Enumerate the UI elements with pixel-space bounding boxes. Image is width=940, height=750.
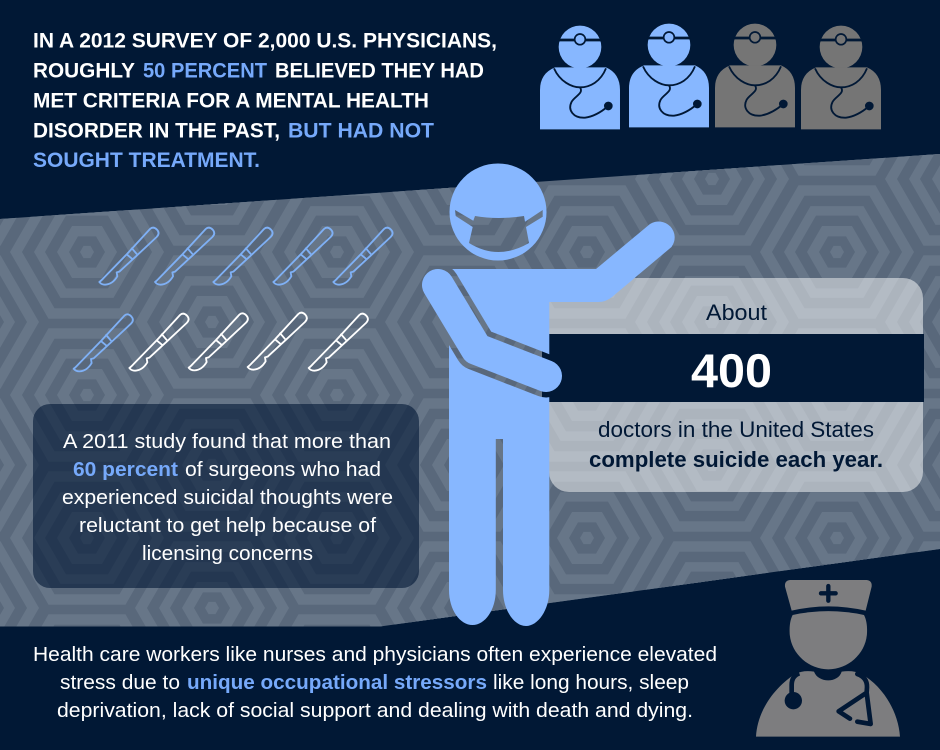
text: occupational stressors paragraph: unique occupational stressors	[187, 672, 487, 694]
lowered arm	[438, 285, 546, 376]
icon: doctor 4 grey	[801, 26, 881, 129]
panel text: licensing concerns	[142, 543, 313, 565]
panel: 400 doctors callout	[542, 278, 924, 492]
figure: masked surgeon pointing	[438, 163, 675, 626]
heading: 2012 survey statement: SOUGHT TREATMENT.	[33, 149, 260, 172]
heading: 2012 survey statement: MET CRITERIA FOR A MENTAL HEALTH	[33, 90, 429, 112]
heading: 2012 survey statement: IN A 2012 SURVEY OF 2,000 U.S. PHYSICIANS,	[33, 30, 497, 52]
heading: 2012 survey statement	[33, 30, 497, 172]
icon: scalpel row 2 highlighted	[74, 314, 133, 371]
icon: doctor 2 highlighted	[629, 24, 709, 127]
heading: 2012 survey statement: BUT HAD NOT	[288, 120, 434, 142]
torso, raised arm and legs	[449, 221, 675, 626]
heading: 2012 survey statement: 50 PERCENT	[143, 60, 267, 82]
text: About: About	[706, 300, 767, 325]
panel text: of surgeons who had	[185, 459, 381, 481]
panel text: experienced suicidal thoughts were	[62, 487, 393, 509]
heading: 2012 survey statement: BELIEVED THEY HAD	[275, 60, 484, 82]
panel text	[62, 431, 393, 565]
text: occupational stressors paragraph: like long hours, sleep	[493, 672, 689, 694]
heading: 2012 survey statement: DISORDER IN THE PAST,	[33, 120, 280, 142]
icon: scalpel row 1	[99, 228, 393, 285]
navy band	[542, 334, 924, 402]
number: 400: 400	[691, 344, 772, 397]
text: doctors in the United States: doctors in the United States	[598, 417, 874, 442]
text: occupational stressors paragraph: stress due to	[60, 672, 180, 694]
panel text: reluctant to get help because of	[79, 515, 376, 537]
hexagon pattern band	[0, 154, 940, 626]
icons: ten scalpels, six highlighted	[74, 228, 393, 371]
text: occupational stressors paragraph: Health care workers like nurses and physicians often experience elevated	[33, 644, 717, 666]
text: occupational stressors paragraph: deprivation, lack of social support and dealing with death and dying.	[57, 700, 693, 722]
heading: 2012 survey statement: ROUGHLY	[33, 60, 135, 82]
text: occupational stressors paragraph	[33, 644, 717, 722]
icon: doctor 3 grey	[715, 24, 795, 127]
icon: doctor 1 highlighted	[540, 26, 620, 129]
text: complete suicide each year: complete suicide each year.	[589, 447, 883, 472]
panel text: A 2011 study found that more than	[63, 431, 391, 453]
icon: scalpel row 2 white	[129, 313, 368, 371]
icons: four doctors, two of four highlighted	[540, 24, 881, 129]
panel text: 60 percent	[73, 459, 178, 481]
panel: 60 percent of surgeons	[33, 404, 419, 588]
head with face mask cutout	[450, 163, 546, 260]
icon: nurse	[756, 580, 900, 737]
